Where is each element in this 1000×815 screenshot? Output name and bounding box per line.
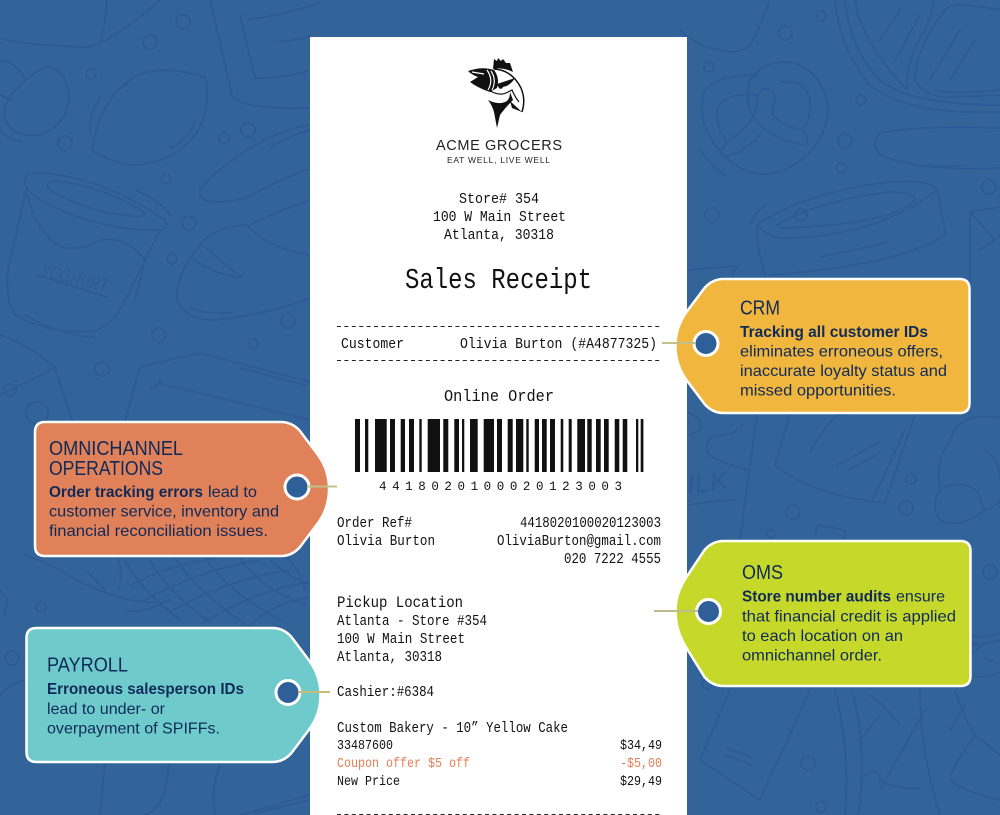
background: grocery doodle pattern: ILK — [685, 464, 732, 500]
tag: CRM: inaccurate loyalty status and — [740, 363, 947, 380]
cashier id: Cashier:#6384 — [337, 685, 434, 701]
pickup location — [337, 594, 487, 666]
tag: CRM: eliminates erroneous offers, — [740, 344, 943, 360]
tag: payroll: PAYROLL — [47, 654, 128, 676]
order details: Order Ref# — [337, 516, 412, 532]
customer row: Olivia Burton (#A4877325) — [460, 337, 657, 353]
tag: omnichannel operations: financial reconciliation issues. — [49, 523, 268, 540]
store address — [433, 192, 566, 244]
tag: omnichannel operations — [35, 422, 337, 556]
icon: acme grocers fish logo — [468, 58, 524, 128]
tag: OMS: OMS — [742, 562, 783, 584]
line item — [337, 721, 662, 814]
tag: OMS: that financial credit is applied — [742, 608, 956, 626]
order details: Olivia Burton — [337, 534, 435, 550]
order details — [337, 516, 661, 568]
online order heading: Online Order — [444, 388, 554, 407]
pickup location: 100 W Main Street — [337, 632, 465, 648]
tag: CRM: CRM — [740, 298, 780, 320]
tag: omnichannel operations: Order tracking errors — [49, 484, 203, 501]
line item: Coupon offer $5 off — [337, 757, 470, 772]
tag: payroll: overpayment of SPIFFs. — [47, 720, 220, 738]
tag: OMS: ensure — [896, 588, 945, 606]
tag: CRM: Tracking all customer IDs — [740, 324, 928, 341]
tag: payroll: lead to under- or — [47, 701, 166, 718]
tag: OMS: to each location on an — [742, 628, 903, 645]
store address: Store# 354 — [459, 192, 539, 208]
tag: omnichannel operations: lead to — [208, 484, 257, 501]
line item: -$5,00 — [620, 757, 662, 772]
store address: Atlanta, 30318 — [444, 228, 554, 244]
tag: payroll — [26, 628, 330, 762]
order details: 020 7222 4555 — [564, 552, 661, 568]
tag: CRM: missed opportunities. — [740, 382, 896, 400]
store address: 100 W Main Street — [433, 210, 566, 226]
receipt title: Sales Receipt — [405, 264, 592, 297]
tag: omnichannel operations: OMNICHANNEL — [49, 438, 183, 460]
tag: omnichannel operations: OPERATIONS — [49, 458, 163, 480]
tag: OMS — [654, 541, 970, 686]
order details: 4418020100020123003 — [520, 516, 661, 532]
tag: CRM — [662, 279, 970, 413]
pickup location: Atlanta, 30318 — [337, 650, 442, 666]
line item: New Price — [337, 775, 400, 790]
brand tagline: EAT WELL, LIVE WELL — [447, 155, 550, 165]
tag: OMS: Store number audits — [742, 588, 891, 606]
pickup location: Atlanta - Store #354 — [337, 614, 487, 630]
tag: payroll: Erroneous salesperson IDs — [47, 681, 244, 698]
tag: OMS: omnichannel order. — [742, 648, 882, 664]
brand name: ACME GROCERS — [436, 138, 562, 154]
customer row — [337, 326, 662, 360]
order details: OliviaBurton@gmail.com — [497, 534, 661, 550]
background: grocery doodle pattern: YOGHURT — [39, 260, 111, 298]
barcode digits: 4418020100020123003 — [379, 480, 622, 494]
customer row: Customer — [341, 337, 404, 353]
line item: 33487600 — [337, 739, 393, 754]
tag: omnichannel operations: customer service, inventory and — [49, 504, 279, 520]
pickup location: Pickup Location — [337, 594, 463, 612]
panel: sales receipt — [310, 37, 687, 815]
barcode — [355, 419, 643, 472]
line item: $34,49 — [620, 739, 662, 754]
line item: Custom Bakery - 10” Yellow Cake — [337, 721, 568, 737]
line item: $29,49 — [620, 775, 662, 790]
